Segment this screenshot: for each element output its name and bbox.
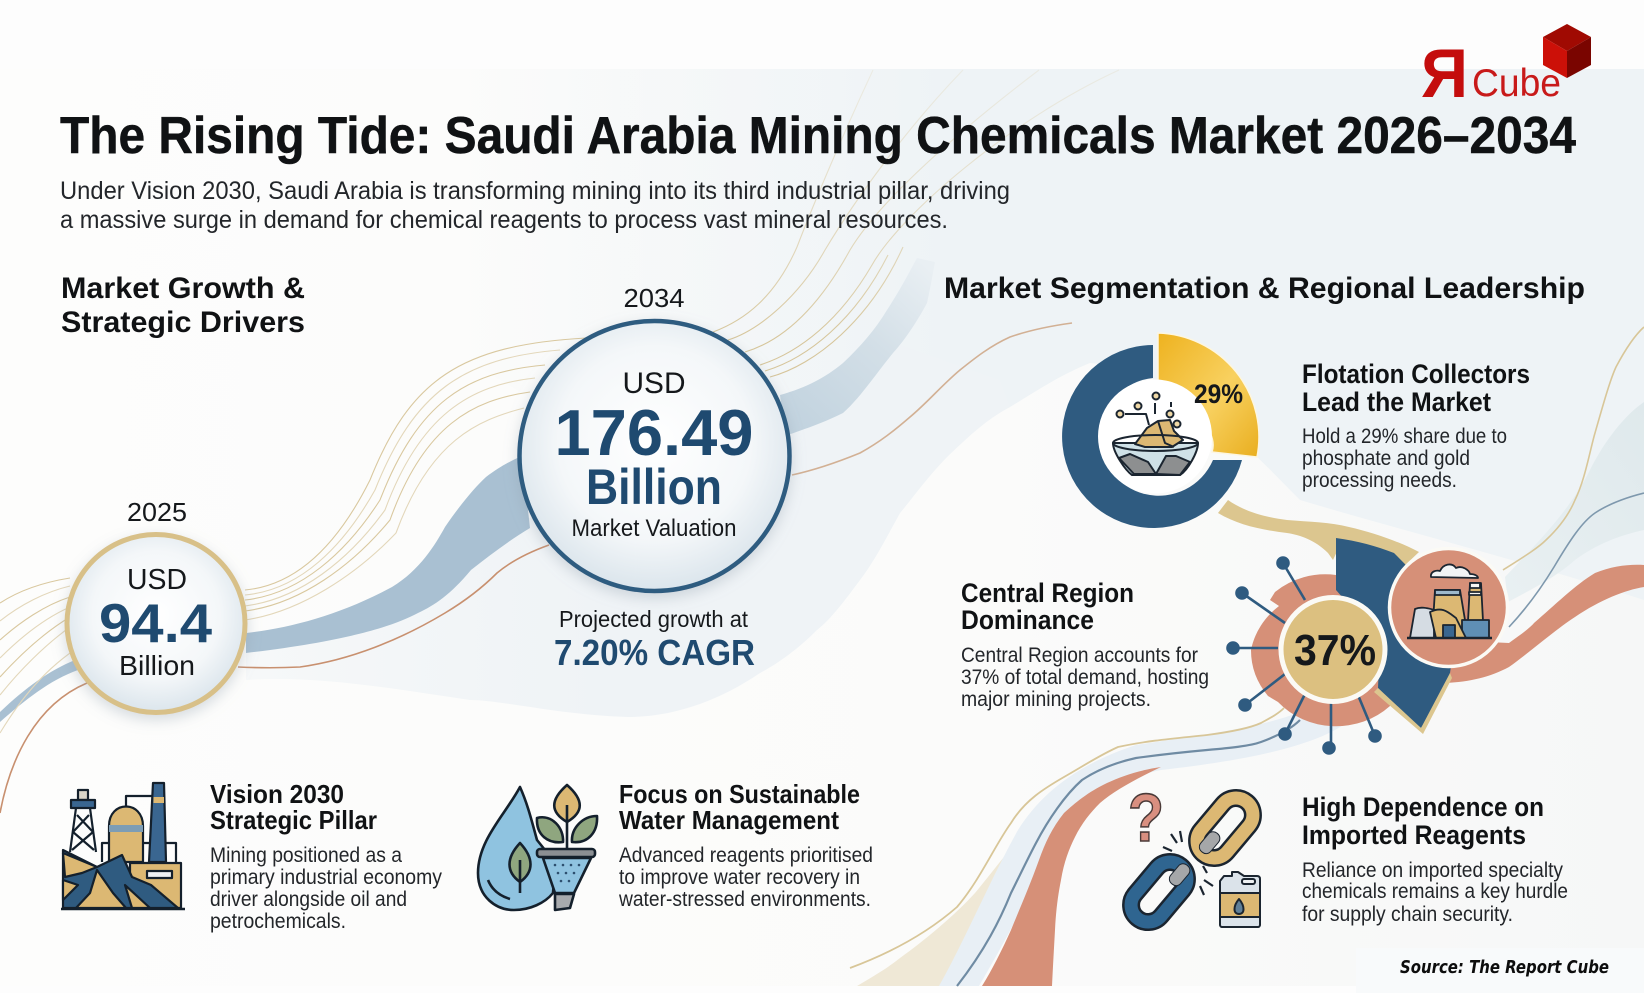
copper trend line bbox=[0, 323, 1072, 813]
CAGR callout bbox=[554, 606, 755, 673]
donut inner disc bbox=[1098, 380, 1212, 494]
heading: market growth: Market Growth & bbox=[61, 272, 305, 305]
logo wordmark: Cube bbox=[1472, 62, 1561, 105]
text: vision 2030: Strategic Pillar bbox=[210, 805, 377, 835]
text: imported reagents: Imported Reagents bbox=[1302, 820, 1526, 850]
factory badge bbox=[1390, 548, 1508, 666]
2034 valuation bubble: 176.49 bbox=[554, 396, 754, 469]
broken link ends bbox=[1167, 829, 1222, 888]
thin tan flow lines bbox=[0, 70, 1119, 733]
growth band: left of 2025 circle bbox=[0, 660, 78, 722]
donut gold segment bbox=[1158, 333, 1259, 457]
text: flotation collectors bbox=[1302, 359, 1530, 492]
heading: market growth bbox=[61, 272, 305, 339]
2025 valuation bubble: 94.4 bbox=[99, 592, 212, 654]
icon: broken chain with question mark and jug bbox=[1124, 780, 1260, 929]
bottom swoosh: blue line bbox=[957, 720, 1300, 986]
text: sustainable water bbox=[618, 779, 873, 911]
text: flotation collectors: phosphate and gold bbox=[1302, 447, 1470, 470]
text: sustainable water: Focus on Sustainable bbox=[619, 779, 860, 809]
blue chain link bbox=[1124, 855, 1194, 929]
text: sustainable water: water-stressed environments. bbox=[618, 888, 871, 911]
source note background bbox=[1356, 948, 1644, 993]
regional hub: central region gear bbox=[1228, 538, 1508, 754]
gear blue fan bbox=[1336, 538, 1460, 728]
text: flotation collectors: Hold a 29% share due to bbox=[1302, 425, 1507, 448]
text: vision 2030: Mining positioned as a bbox=[210, 844, 402, 867]
2025 valuation bubble: USD bbox=[127, 564, 187, 596]
2034 valuation bubble: Market Valuation bbox=[572, 515, 736, 542]
text: vision 2030 bbox=[210, 779, 442, 933]
2034 valuation bubble: Billion bbox=[586, 459, 722, 515]
bottom swoosh: salmon bbox=[982, 767, 1161, 986]
text: central region bbox=[961, 578, 1209, 711]
donut value: 29% bbox=[1194, 379, 1243, 409]
growth band: between the circles bbox=[246, 456, 530, 653]
icon: factory bbox=[1407, 564, 1492, 638]
bottom swoosh: pale blue bbox=[939, 712, 1350, 986]
right side pale swoosh bbox=[1505, 402, 1644, 602]
bottom swoosh: sand bbox=[857, 840, 1018, 986]
regional hub: central region gear: 37% bbox=[1294, 626, 1376, 675]
2025 valuation bubble: Billion bbox=[119, 650, 195, 681]
text: imported reagents: High Dependence on bbox=[1302, 792, 1544, 822]
text: imported reagents: Reliance on imported specialty bbox=[1302, 859, 1563, 882]
text: sustainable water: Advanced reagents prioritised bbox=[619, 844, 873, 867]
logo cube bbox=[1543, 24, 1591, 78]
gear center value bbox=[1281, 598, 1385, 702]
growth band: right of 2034 circle bbox=[780, 258, 935, 436]
text: central region: Dominance bbox=[961, 605, 1094, 635]
reagent jug bbox=[1220, 872, 1260, 927]
background: pale upper right wash bbox=[450, 69, 1644, 630]
CAGR callout: Projected growth at bbox=[559, 606, 749, 632]
icon: flotation bowl bbox=[1113, 392, 1198, 475]
icon: mining and industry bbox=[61, 783, 185, 909]
text: central region: Central Region accounts for bbox=[961, 644, 1198, 667]
gear salmon ring bbox=[1251, 574, 1400, 726]
subtitle: Under Vision 2030, Saudi Arabia is transforming mining into its third industrial pillar, driving bbox=[60, 177, 1010, 205]
right side flow lines bbox=[1503, 327, 1644, 627]
text: vision 2030: Vision 2030 bbox=[210, 779, 344, 809]
heading: market growth: Strategic Drivers bbox=[61, 306, 305, 339]
heading: market segmentation: Market Segmentation & Regional Leadership bbox=[944, 272, 1585, 305]
text: imported reagents bbox=[1302, 792, 1568, 926]
subtitle bbox=[60, 177, 1010, 234]
CAGR callout: 7.20% CAGR bbox=[554, 632, 755, 673]
bottom swoosh: tan line bbox=[850, 708, 1284, 968]
donut blue arc bbox=[1062, 345, 1242, 528]
logo bbox=[1421, 24, 1591, 112]
text: vision 2030: driver alongside oil and bbox=[210, 888, 407, 911]
text: sustainable water: Water Management bbox=[619, 805, 839, 835]
icon: water and plant bbox=[478, 785, 597, 910]
text: sustainable water: to improve water recovery in bbox=[619, 866, 860, 889]
donut chart: flotation collectors bbox=[1062, 333, 1259, 528]
connector ribbon: tan bbox=[1218, 500, 1419, 570]
background: pale area under the growth curve bbox=[246, 345, 1010, 717]
break sparks bbox=[1163, 831, 1213, 895]
text: imported reagents: for supply chain security. bbox=[1302, 903, 1513, 926]
text: central region: 37% of total demand, hosting bbox=[961, 666, 1209, 689]
gold chain link bbox=[1190, 791, 1260, 865]
2034 valuation bubble: USD bbox=[622, 367, 686, 400]
text: vision 2030: primary industrial economy bbox=[210, 866, 442, 889]
text: flotation collectors: processing needs. bbox=[1302, 469, 1457, 492]
gear spokes bbox=[1228, 558, 1380, 754]
text: central region: major mining projects. bbox=[961, 688, 1151, 711]
2034 valuation bubble: 2034 bbox=[624, 283, 684, 313]
question mark: ? bbox=[1128, 780, 1164, 856]
text: imported reagents: chemicals remains a key hurdle bbox=[1302, 880, 1568, 903]
2025 valuation bubble bbox=[67, 497, 245, 712]
text: flotation collectors: Lead the Market bbox=[1302, 387, 1491, 417]
logo reversed R: Я bbox=[1421, 35, 1468, 112]
text: central region: Central Region bbox=[961, 578, 1134, 608]
text: vision 2030: petrochemicals. bbox=[210, 910, 346, 933]
subtitle: a massive surge in demand for chemical reagents to process vast mineral resources. bbox=[60, 206, 948, 234]
gear tan edge bbox=[1374, 673, 1452, 734]
2034 valuation bubble bbox=[520, 283, 790, 591]
text: flotation collectors: Flotation Collectors bbox=[1302, 359, 1530, 389]
2025 valuation bubble: 2025 bbox=[127, 497, 187, 527]
salmon ribbon on the right bbox=[1445, 565, 1644, 683]
